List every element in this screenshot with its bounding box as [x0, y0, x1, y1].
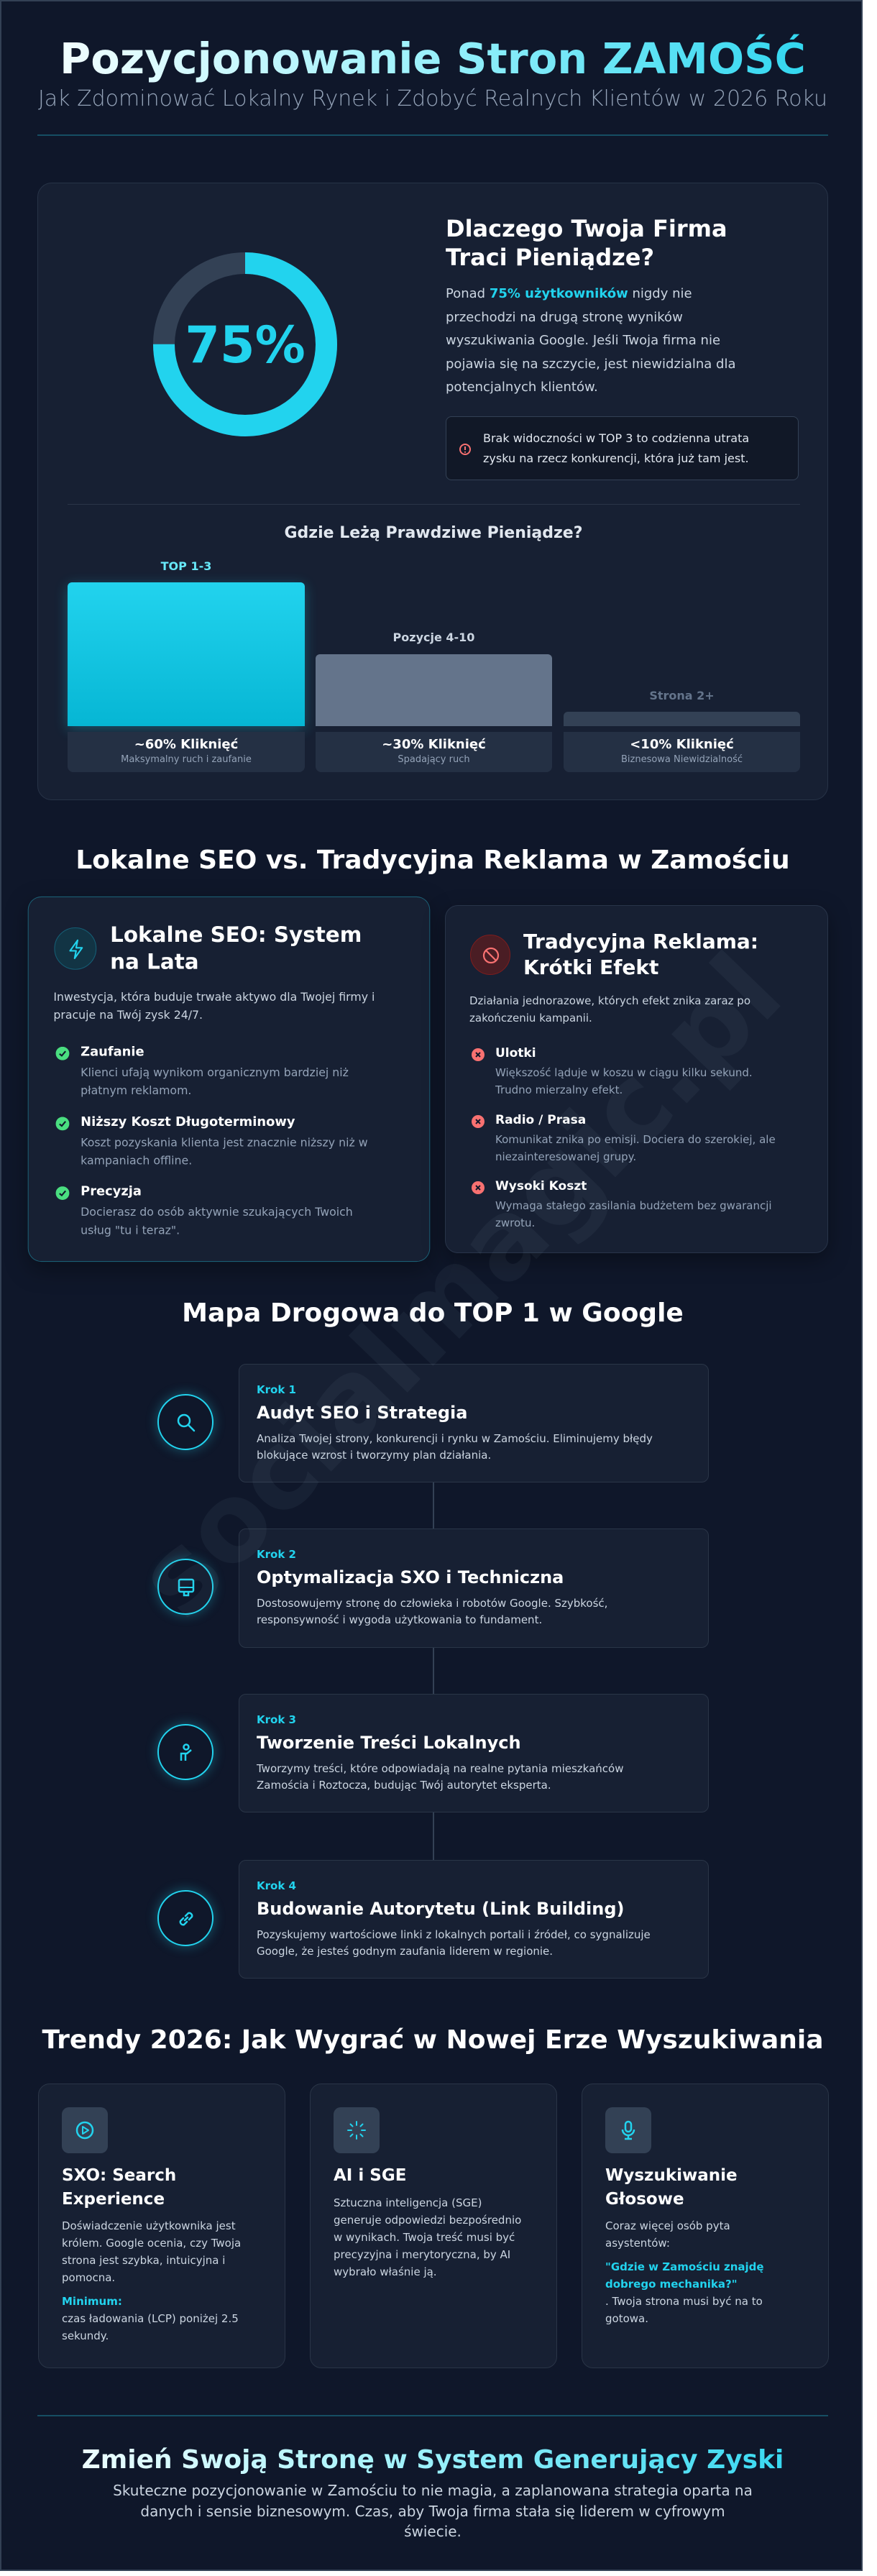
- bar: top 1-3: Maksymalny ruch i zaufanie: [121, 754, 252, 765]
- description: Inwestycja, która buduje trwałe aktywo dla Twojej firmy i: [53, 990, 375, 1004]
- paragraph: [446, 286, 735, 395]
- CTA heading: Zmień Swoją Stronę w System Generujący Zyski: [82, 2445, 784, 2475]
- step card: Tworzenie Treści Lokalnych: [257, 1733, 521, 1753]
- panel: local SEO: [28, 897, 430, 1262]
- step card: Krok 2: [257, 1548, 296, 1561]
- step card: blokujące wzrost i tworzymy plan działania.: [257, 1449, 491, 1462]
- step 1: [152, 1364, 709, 1482]
- panel: traditional ads: niezainteresowanej grupy.: [495, 1150, 636, 1163]
- panel: local SEO: płatnym reklamom.: [81, 1083, 191, 1097]
- title: Pozycjonowanie Stron ZAMOŚĆ: [60, 34, 806, 83]
- CTA text: Skuteczne pozycjonowanie w Zamościu to nie magia, a zaplanowana strategia oparta na: [113, 2482, 753, 2499]
- heading: [446, 215, 727, 271]
- item: flyers: [472, 1046, 753, 1096]
- description: Działania jednorazowe, których efekt znika zaraz po: [469, 994, 750, 1007]
- panel: local SEO: Docierasz do osób aktywnie szukających Twoich: [81, 1205, 353, 1219]
- panel: traditional ads: Ulotki: [495, 1046, 536, 1060]
- description: pracuje na Twój zysk 24/7.: [53, 1008, 203, 1022]
- icon: monitor: [157, 1559, 213, 1615]
- step card: [239, 1860, 709, 1979]
- item: precision: [56, 1184, 353, 1237]
- description: [469, 994, 750, 1025]
- panel: why losing money: [37, 183, 828, 800]
- panel: trend voice: Wyszukiwanie: [605, 2166, 738, 2185]
- panel: local SEO: Niższy Koszt Długoterminowy: [81, 1114, 295, 1129]
- step card: responsywność i wygoda użytkowania to fundament.: [257, 1613, 542, 1626]
- panel: trend SXO: pomocna.: [62, 2271, 115, 2284]
- item: radio: [472, 1113, 776, 1163]
- callout: zysku na rzecz konkurencji, która już tam jest.: [483, 452, 749, 465]
- panel: trend AI: wybrało właśnie ją.: [334, 2265, 437, 2278]
- step card: [239, 1364, 709, 1482]
- panel: trend AI: [310, 2084, 557, 2368]
- step card: Krok 3: [257, 1713, 296, 1726]
- heading: trends 2026: Trendy 2026: Jak Wygrać w Nowej Erze Wyszukiwania: [42, 2025, 824, 2055]
- step card: [239, 1528, 709, 1648]
- bar: page 2+: Biznesowa Niewidzialność: [621, 754, 743, 765]
- icon: person writing: [157, 1724, 213, 1780]
- panel: trend voice: asystentów:: [605, 2237, 670, 2250]
- bar: positions 4-10: [316, 631, 552, 772]
- heading: roadmap: Mapa Drogowa do TOP 1 w Google: [182, 1298, 684, 1328]
- heading: Dlaczego Twoja Firma: [446, 215, 727, 242]
- panel: trend SXO: SXO: Search: [62, 2166, 176, 2185]
- panel: trend voice: dobrego mechanika?": [605, 2278, 738, 2291]
- panel: trend SXO: [38, 2084, 285, 2368]
- icon: play: [62, 2107, 108, 2153]
- step 2: [152, 1528, 709, 1648]
- bar: page 2+: <10% Kliknięć: [630, 737, 734, 752]
- heading: SEO vs ads: Lokalne SEO vs. Tradycyjna Reklama w Zamościu: [75, 845, 790, 875]
- icon: link: [157, 1890, 213, 1946]
- bar: positions 4-10: Pozycje 4-10: [393, 631, 474, 644]
- step card: Pozyskujemy wartościowe linki z lokalnych portali i źródeł, co sygnalizuje: [257, 1928, 651, 1941]
- step card: Google, że jesteś godnym zaufania liderem w regionie.: [257, 1945, 553, 1958]
- panel: trend AI: generuje odpowiedzi bezpośrednio: [334, 2214, 521, 2227]
- paragraph: wyszukiwania Google. Jeśli Twoja firma nie: [446, 333, 720, 348]
- heading: Traci Pieniądze?: [446, 244, 654, 271]
- panel: local SEO: Zaufanie: [81, 1045, 144, 1060]
- item: high cost: [472, 1179, 772, 1229]
- panel: trend AI: precyzyjna i merytoryczna, by AI: [334, 2248, 510, 2261]
- panel: trend SXO: Experience: [62, 2190, 165, 2209]
- panel: trend AI: Sztuczna inteligencja (SGE): [334, 2196, 482, 2209]
- CTA text: [113, 2482, 753, 2540]
- step card: Optymalizacja SXO i Techniczna: [257, 1567, 564, 1587]
- item: trust: [56, 1045, 349, 1097]
- panel: trend SXO: Doświadczenie użytkownika jest: [62, 2219, 236, 2232]
- bar: positions 4-10: Spadający ruch: [398, 754, 470, 765]
- title: Tradycyjna Reklama:: [523, 930, 758, 953]
- CTA text: danych i sensie biznesowym. Czas, aby Twoja firma stała się liderem w cyfrowym: [140, 2502, 725, 2519]
- step 4: [152, 1860, 709, 1979]
- panel: trend voice: gotowa.: [605, 2312, 648, 2325]
- bar: top 1-3: [62, 559, 311, 772]
- panel: traditional ads: Wysoki Koszt: [495, 1179, 587, 1193]
- step card: Dostosowujemy stronę do człowieka i robotów Google. Szybkość,: [257, 1597, 607, 1610]
- title: Lokalne SEO: System: [110, 922, 362, 947]
- panel: trend SXO: czas ładowania (LCP) poniżej 2.5: [62, 2312, 239, 2325]
- panel: local SEO: usług "tu i teraz".: [81, 1224, 180, 1237]
- item: lower cost: [56, 1114, 368, 1168]
- callout: [446, 416, 799, 480]
- subtitle: Jak Zdominować Lokalny Rynek i Zdobyć Realnych Klientów w 2026 Roku: [38, 86, 827, 111]
- description: [53, 990, 375, 1022]
- panel: trend SXO: strona jest szybka, intuicyjna i: [62, 2254, 225, 2267]
- paragraph: pojawia się na szczycie, jest niewidzialna dla: [446, 357, 735, 371]
- donut chart 75%: 75%: [185, 316, 306, 375]
- bar: top 1-3: ~60% Kliknięć: [134, 737, 238, 752]
- panel: traditional ads: Wymaga stałego zasilania budżetem bez gwarancji: [495, 1199, 772, 1212]
- panel: trend AI: AI i SGE: [334, 2166, 406, 2185]
- step card: Audyt SEO i Strategia: [257, 1403, 467, 1423]
- bar chart: clicks by position: Gdzie Leżą Prawdziwe Pieniądze?: [285, 524, 582, 542]
- panel: trend voice: Głosowe: [605, 2190, 684, 2209]
- panel: trend SXO: sekundy.: [62, 2329, 109, 2342]
- step 3: [152, 1694, 709, 1812]
- icon: lightning: [54, 927, 96, 970]
- step card: Analiza Twojej strony, konkurencji i rynku w Zamościu. Eliminujemy błędy: [257, 1432, 653, 1445]
- panel: trend voice: . Twoja strona musi być na to: [605, 2295, 763, 2308]
- panel: traditional ads: zwrotu.: [495, 1216, 535, 1229]
- step card: Krok 1: [257, 1383, 296, 1396]
- paragraph: przechodzi na drugą stronę wyników: [446, 309, 683, 325]
- panel: traditional ads: Komunikat znika po emisji. Dociera do szerokiej, ale: [495, 1133, 776, 1146]
- bar: page 2+: [564, 689, 800, 772]
- panel: trend voice: [582, 2084, 829, 2368]
- panel: trend voice: Coraz więcej osób pyta: [605, 2219, 730, 2232]
- bar: positions 4-10: ~30% Kliknięć: [382, 737, 486, 752]
- watermark: socialmagic.pl: [113, 930, 805, 1641]
- panel: traditional ads: Większość ląduje w koszu w ciągu kilku sekund.: [495, 1066, 753, 1079]
- paragraph: potencjalnych klientów.: [446, 380, 598, 395]
- step card: Krok 4: [257, 1879, 296, 1892]
- icon: ban: [470, 935, 510, 975]
- callout: Brak widoczności w TOP 3 to codzienna utrata: [483, 431, 749, 445]
- panel: local SEO: Koszt pozyskania klienta jest znacznie niższy niż w: [81, 1136, 368, 1150]
- icon: microphone: [605, 2107, 651, 2153]
- panel: trend voice: "Gdzie w Zamościu znajdę: [605, 2260, 764, 2273]
- step card: [239, 1694, 709, 1812]
- title: [523, 930, 758, 979]
- icon: AI spinner: [334, 2107, 380, 2153]
- title: na Lata: [110, 949, 199, 974]
- step card: Zamościa i Roztocza, budując Twój autorytet eksperta.: [257, 1779, 551, 1792]
- bar chart: clicks by position: [62, 524, 800, 772]
- step card: Tworzymy treści, które odpowiadają na realne pytania mieszkańców: [257, 1762, 623, 1775]
- panel: trend SXO: Minimum:: [62, 2295, 122, 2308]
- panel: local SEO: kampaniach offline.: [81, 1154, 192, 1168]
- bar: page 2+: Strona 2+: [649, 689, 715, 702]
- paragraph: Ponad 75% użytkowników nigdy nie: [446, 286, 692, 301]
- icon: alert: [459, 444, 471, 455]
- panel: traditional ads: Trudno mierzalny efekt.: [495, 1083, 623, 1096]
- donut chart 75%: [153, 252, 337, 436]
- panel: traditional ads: [445, 905, 828, 1253]
- icon: search: [157, 1394, 213, 1450]
- step card: Budowanie Autorytetu (Link Building): [257, 1899, 624, 1919]
- bar: top 1-3: TOP 1-3: [161, 559, 211, 573]
- panel: trend AI: w wynikach. Twoja treść musi być: [334, 2231, 515, 2244]
- description: zakończeniu kampanii.: [469, 1012, 592, 1025]
- title: [110, 922, 362, 974]
- CTA text: świecie.: [404, 2523, 462, 2540]
- panel: local SEO: Precyzja: [81, 1184, 142, 1199]
- title: Krótki Efekt: [523, 955, 658, 979]
- panel: traditional ads: Radio / Prasa: [495, 1113, 586, 1127]
- panel: local SEO: Klienci ufają wynikom organicznym bardziej niż: [81, 1065, 349, 1079]
- panel: trend SXO: królem. Google ocenia, czy Twoja: [62, 2237, 241, 2250]
